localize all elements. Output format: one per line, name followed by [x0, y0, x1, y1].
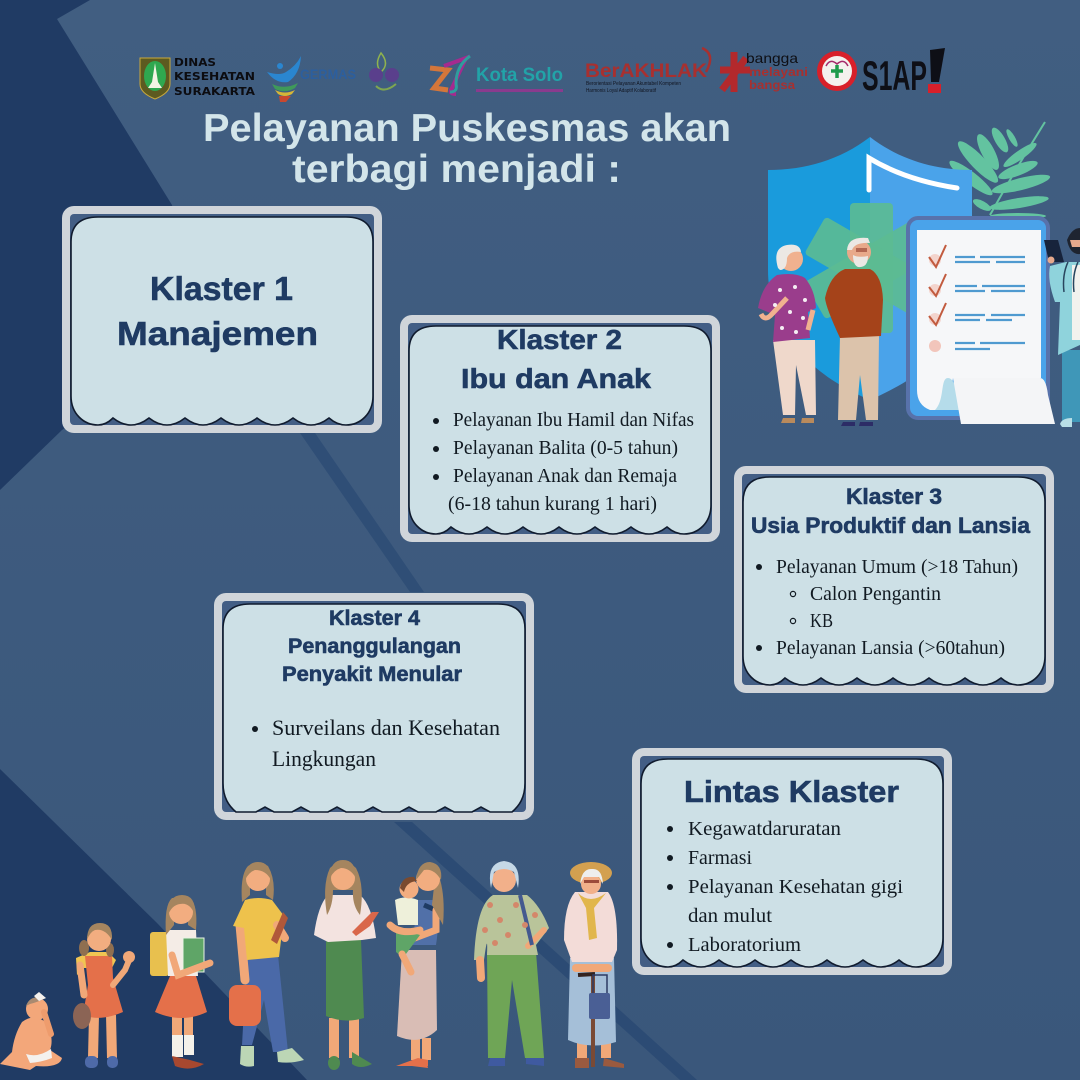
- title: [203, 107, 731, 191]
- list: cross-cluster services: [667, 818, 903, 956]
- logo: bangga melayani bangsa: melayani: [749, 65, 808, 79]
- figure: woman with green skirt: [314, 860, 379, 1070]
- list: Klaster 3 services: Pelayanan Umum (>18 Tahun): [776, 557, 1018, 578]
- logo: Kota Solo: [430, 56, 563, 94]
- figure: doctor: [1044, 228, 1080, 427]
- figure: teen with orange backpack: [229, 862, 304, 1067]
- heading: Klaster 4 Penanggulangan Penyakit Menular: Penanggulangan: [288, 635, 461, 658]
- list: Klaster 3 services: KB: [810, 611, 833, 632]
- list: Klaster 3 services: Pelayanan Lansia (>60tahun): [776, 638, 1005, 659]
- logo: Germas: GERMAS: [300, 66, 356, 82]
- figure: elderly woman with hat and cane: [564, 862, 624, 1068]
- list: cross-cluster services: Pelayanan Kesehatan gigi: [688, 876, 903, 898]
- heading: Klaster 1 Manajemen: [117, 270, 318, 352]
- figure: baby: [0, 992, 62, 1070]
- list: Klaster 4 services: [252, 715, 500, 771]
- logo: Dinas Kesehatan Surakarta: KESEHATAN: [174, 70, 255, 83]
- logo: purple emblem: [369, 53, 399, 90]
- icon: clipboard checklist: [908, 218, 1055, 424]
- heading: Klaster 2 Ibu dan Anak: Klaster 2: [497, 324, 622, 355]
- figure: elderly man: [825, 238, 883, 426]
- heading: Klaster 3 Usia Produktif dan Lansia: [751, 484, 1031, 538]
- illustration: life-stage figures: [0, 860, 624, 1070]
- logo: BerAKHLAK: BerAKHLAK: [585, 61, 707, 82]
- list: cross-cluster services: Laboratorium: [688, 934, 801, 956]
- heading: Lintas Klaster: Lintas Klaster: [684, 774, 899, 809]
- panel: Klaster 1: [62, 206, 382, 433]
- figure: schoolgirl with backpack: [150, 895, 210, 1069]
- icon: palm leaves: [946, 122, 1052, 219]
- heading: Klaster 1 Manajemen: Manajemen: [117, 315, 318, 352]
- heading: Klaster 2 Ibu dan Anak: [461, 324, 651, 394]
- title: Pelayanan Puskesmas akan: [203, 107, 731, 150]
- logo: BerAKHLAK: Berorientasi Pelayanan Akuntabel Kompeten: [586, 81, 681, 87]
- list: Klaster 2 services: Pelayanan Anak dan Remaja: [453, 466, 677, 487]
- figure: elderly woman: [758, 245, 816, 423]
- panel: Klaster 4: [214, 593, 534, 820]
- logo: BerAKHLAK: Harmonis Loyal Adaptif Kolaboratif: [586, 88, 657, 94]
- list: Klaster 2 services: (6-18 tahun kurang 1 hari): [448, 494, 657, 515]
- heading: Klaster 4 Penanggulangan Penyakit Menular: Klaster 4: [329, 607, 420, 630]
- logo: Dinas Kesehatan Surakarta: SURAKARTA: [174, 85, 256, 98]
- list: cross-cluster services: Farmasi: [688, 847, 752, 869]
- heading: Klaster 3 Usia Produktif dan Lansia: Klaster 3: [846, 484, 942, 509]
- heading: Klaster 2 Ibu dan Anak: Ibu dan Anak: [461, 363, 651, 394]
- list: Klaster 2 services: [433, 410, 694, 515]
- figure: older woman in green trousers: [474, 861, 549, 1066]
- icon: shield: [768, 137, 972, 400]
- heading: Klaster 3 Usia Produktif dan Lansia: Usia Produktif dan Lansia: [751, 513, 1031, 538]
- heading: Klaster 4 Penanggulangan Penyakit Menular: Penyakit Menular: [282, 663, 462, 686]
- title: terbagi menjadi :: [292, 148, 621, 191]
- panel: Lintas Klaster: [632, 748, 952, 975]
- heading: Klaster 1 Manajemen: Klaster 1: [150, 270, 293, 307]
- logo: Dinas Kesehatan Surakarta: [140, 56, 256, 99]
- logo: bangga melayani bangsa: [720, 50, 808, 92]
- logo: Germas: [267, 56, 356, 102]
- list: Klaster 2 services: Pelayanan Balita (0-5 tahun): [453, 438, 678, 459]
- figure: toddler girl with teddy: [73, 923, 135, 1068]
- panel: Klaster 2: [400, 315, 720, 542]
- list: cross-cluster services: Kegawatdaruratan: [688, 818, 841, 840]
- logo: red circle emblem: [817, 51, 857, 91]
- list: Klaster 2 services: Pelayanan Ibu Hamil dan Nifas: [453, 410, 694, 431]
- list: Klaster 4 services: Lingkungan: [272, 746, 376, 771]
- heading: Klaster 4 Penanggulangan Penyakit Menular: [282, 607, 462, 686]
- logo: bangga melayani bangsa: bangga: [746, 50, 798, 66]
- list: Klaster 3 services: [756, 557, 1018, 659]
- panel: Klaster 3: [734, 466, 1054, 693]
- figure: mother holding child: [390, 862, 444, 1068]
- logo: Kota Solo: Kota Solo: [476, 65, 563, 86]
- logo: SIAP!: S1AP: [862, 52, 927, 99]
- logo strip: [140, 48, 945, 102]
- list: Klaster 3 services: Calon Pengantin: [810, 584, 941, 605]
- logo: BerAKHLAK: [585, 48, 710, 94]
- list: Klaster 4 services: Surveilans dan Kesehatan: [272, 715, 500, 740]
- illustration: health shield, checklist and patients: [758, 122, 1080, 427]
- list: cross-cluster services: dan mulut: [688, 905, 772, 927]
- logo: Dinas Kesehatan Surakarta: DINAS: [174, 56, 216, 69]
- logo: bangga melayani bangsa: bangsa: [749, 78, 795, 92]
